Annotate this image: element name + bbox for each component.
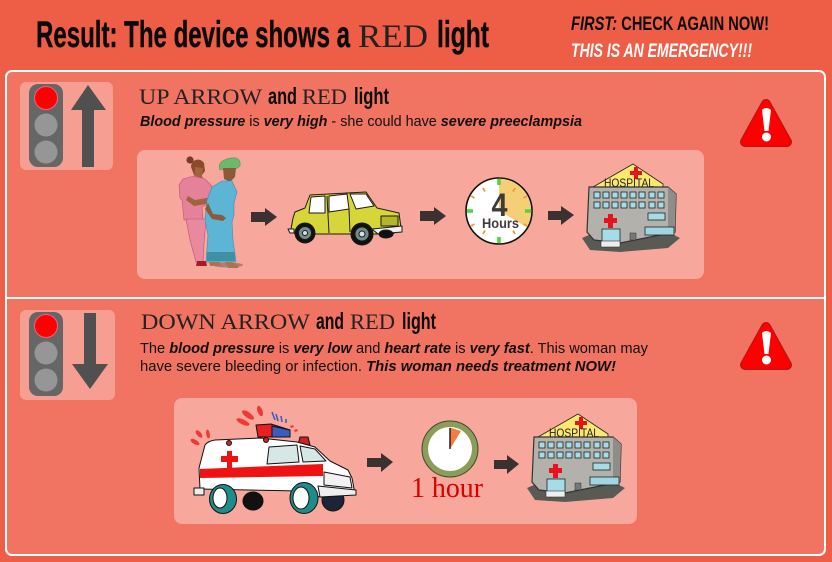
text: very low blood pressure <box>140 341 649 375</box>
icon: hospital: HOSPITAL <box>549 426 599 440</box>
title: RED <box>358 19 428 55</box>
icon: traffic light with up arrow <box>20 82 113 170</box>
heading: down arrow and red light <box>141 308 436 334</box>
icon: 4 hours clock: Hours <box>482 215 519 231</box>
icon: hospital: HOSPITAL <box>604 176 654 190</box>
icon: 1 hour clock <box>411 421 484 504</box>
arrow <box>251 208 277 226</box>
title: Result: The device shows a <box>36 14 350 55</box>
heading: down arrow and red light: DOWN ARROW <box>141 309 310 334</box>
heading: up arrow and red light: UP ARROW <box>139 84 262 109</box>
icon: nurse and pregnant woman <box>179 156 243 268</box>
icon: traffic light with down arrow <box>20 310 115 400</box>
instruction: check again: FIRST: CHECK AGAIN NOW! <box>571 13 769 35</box>
heading: down arrow and red light: and <box>316 308 344 334</box>
icon: warning triangle <box>745 327 787 365</box>
instruction: emergency: THIS IS AN EMERGENCY!!! <box>571 40 752 62</box>
arrow <box>367 453 393 472</box>
arrow <box>548 206 574 225</box>
icon: ambulance <box>190 405 356 514</box>
panel: referral steps, 4 hours <box>137 150 704 279</box>
heading: down arrow and red light: RED <box>350 309 395 334</box>
arrow <box>494 455 519 474</box>
heading: up arrow and red light: and <box>268 83 297 109</box>
heading: up arrow and red light: light <box>354 83 389 109</box>
heading: down arrow and red light: light <box>402 308 436 334</box>
icon: 1 hour clock: 1 hour <box>411 473 484 504</box>
text: very low blood pressure: have severe bleeding or infection. This woman needs treatment NOW! <box>140 359 616 375</box>
text: very low blood pressure: The blood pressure is very low and heart rate is very fast. This woman may <box>140 341 649 357</box>
heading: up arrow and red light: RED <box>302 84 347 109</box>
heading: up arrow and red light <box>139 83 389 109</box>
icon: hospital <box>582 164 680 252</box>
text: very high blood pressure: Blood pressure is very high - she could have severe preeclampsia <box>140 114 582 130</box>
icon: hospital <box>527 414 625 502</box>
icon: warning triangle <box>745 104 787 142</box>
arrow <box>420 207 446 225</box>
title: light <box>437 14 489 55</box>
panel: referral steps, 1 hour <box>174 398 637 524</box>
panel: up arrow section <box>20 82 787 279</box>
icon: 4 hours clock: 4 <box>492 187 508 223</box>
icon: yellow car <box>288 192 402 245</box>
panel: down arrow section <box>20 308 787 524</box>
icon: 4 hours clock <box>466 178 532 244</box>
